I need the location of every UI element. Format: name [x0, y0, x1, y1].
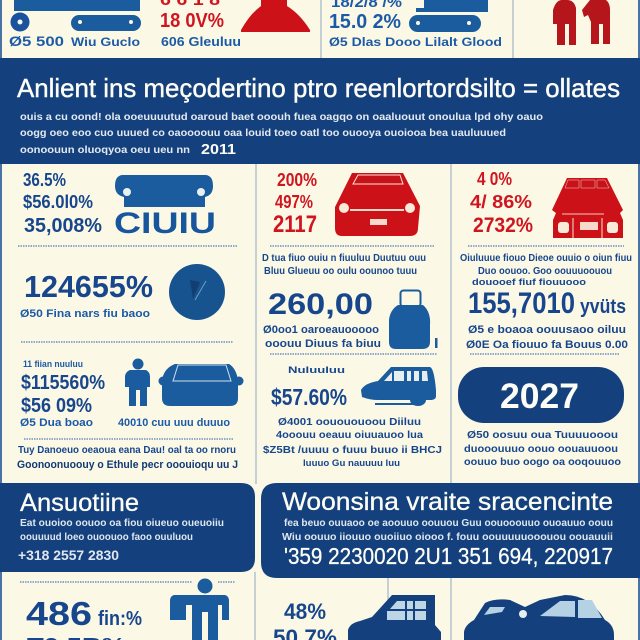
statistics: Nuluuluu — [288, 365, 345, 375]
panel: header band — [0, 58, 640, 164]
caption: Ø0E Oa fiouuo fa Bouus 0.00 — [466, 339, 628, 351]
big number: yvüts — [580, 296, 626, 318]
statistics group: 11 fiian nuuluu — [23, 359, 83, 369]
panel: bottom middle statistic — [273, 595, 441, 640]
big number: 260,00 — [268, 288, 373, 321]
description: Wiu oouuo iiouuo ouoiiuo oiooo f. fouu oouuuuuooouou oouauuii — [282, 532, 613, 543]
blue statistics: 15.0 2% — [329, 11, 401, 33]
red statistics: 4/ 86% — [470, 192, 532, 212]
icon: dark car — [464, 595, 614, 640]
description text: oogg oeo eoo cuo uuued co oaoooouu oaa louid toeo oatl too ouooya ouoiooa bea uauluuued — [20, 128, 506, 139]
red statistics: 4 0% — [477, 169, 512, 189]
panel: bottom left statistic — [26, 578, 229, 640]
red statistics: 18 0V% — [160, 10, 224, 32]
panel: right column — [458, 169, 632, 468]
description — [262, 253, 426, 277]
caption: 40010 cuu uuu duuuo — [118, 417, 230, 429]
red statistics: 200% — [277, 170, 317, 190]
description — [464, 430, 621, 468]
number row: '359 2230020 2U1 351 694, 220917 — [284, 543, 613, 569]
caption: Ø5 e boaoa oouusaoo oiluu — [468, 324, 626, 336]
panel: left column — [17, 170, 244, 471]
label: ciuiu: CIUIU — [114, 207, 216, 240]
icon: person — [170, 578, 229, 640]
description — [18, 518, 224, 563]
description: duooouuuo oouo oouauuoou — [464, 444, 618, 455]
description: Ø50 oosuu oua Tuuuuooou — [467, 430, 618, 441]
description: Ø4001 oouououoou Diiluu — [278, 417, 421, 428]
icon: tractor — [389, 290, 438, 349]
description — [460, 253, 632, 287]
caption: Ø50 Fina nars fiu baoo — [20, 308, 150, 320]
icon: dark vehicle — [348, 595, 441, 640]
statistics group — [23, 170, 102, 237]
icon: circle badge — [169, 264, 225, 320]
statistics — [271, 365, 347, 410]
icon: suv — [361, 367, 436, 406]
caption — [9, 33, 140, 49]
panel: top left fragment — [9, 0, 141, 49]
icon: sofa — [158, 364, 244, 406]
panel: top centre fragment — [160, 0, 310, 49]
red statistics — [273, 170, 317, 238]
year pill: 2027 — [500, 377, 579, 416]
description: luuuo Gu nauuuu luu — [303, 458, 400, 468]
statistics: $57.60% — [271, 384, 347, 410]
percentages: 48% — [284, 599, 326, 624]
icon: red vehicle fragment — [241, 0, 310, 32]
big number — [26, 595, 142, 640]
heading: Woonsina vraite sracencinte — [282, 488, 613, 516]
description: D tua fiuo ouiu n fiuuluu Duutuu ouu — [262, 253, 426, 264]
footnote: Goonoonuoouy o Ethule pecr ooouioqu uu J — [17, 459, 238, 471]
caption — [466, 324, 628, 351]
description: douooef fiuf fiouuooo — [472, 277, 587, 287]
statistics group: Ø5 Dua boao — [20, 417, 93, 429]
description: Duo oouoo. Goo oouuuoouou — [478, 266, 612, 277]
red statistics — [470, 169, 533, 237]
description: Eat ouoioo oouoo oa fiou oiueuo oueuoiiu — [20, 518, 224, 529]
icon: person — [125, 358, 150, 406]
red statistics: 2732% — [473, 214, 533, 237]
red statistics — [160, 0, 224, 32]
panel: top third fragment — [329, 0, 502, 49]
description: oouuo buo oogo oa ooqouuoo — [464, 457, 621, 468]
big number: 155,7010 — [468, 287, 575, 320]
footnote: Tuy Danoeuo oeaoua eana Dau! oal ta oo rnoru — [18, 445, 236, 456]
description: $Z5Bt /uuuu o fuuu buuo ii BHCJ — [263, 445, 442, 456]
big number: 124655% — [24, 269, 153, 304]
icon: red car front — [552, 178, 623, 238]
caption: Ø5 500 — [9, 33, 64, 49]
heading: Ansuotiine — [20, 489, 139, 517]
footnote — [17, 445, 238, 471]
red statistics: 497% — [275, 192, 313, 212]
icon: blue vehicle fragment — [409, 0, 488, 32]
caption: Ø0oo1 oaroeauooooo — [263, 324, 379, 336]
percentages — [273, 599, 337, 640]
description: oouuuud loeo ouoouoo faoo ouuluou — [20, 532, 193, 543]
title: Anlient ins meçodertino ptro reenlortordsilto = ollates — [17, 73, 620, 103]
blue statistics — [329, 0, 402, 33]
statistics group: $56 09% — [21, 395, 92, 417]
statistics group: 35,008% — [24, 215, 102, 237]
panel: middle column — [262, 170, 442, 468]
panel: bottom right — [261, 483, 640, 578]
big number: fin:% — [98, 608, 142, 630]
statistics group: 36.5% — [23, 170, 66, 190]
description — [263, 417, 442, 468]
description — [282, 518, 613, 543]
caption: 606 Gleuluu — [161, 34, 241, 49]
year pill — [458, 367, 624, 423]
big number: 486 — [26, 595, 92, 632]
statistics group — [20, 359, 105, 429]
description: +318 2557 2830 — [18, 547, 119, 563]
caption: Wiu Guclo — [71, 35, 140, 49]
statistics group: $56.0l0% — [23, 192, 93, 212]
description text: 2011 — [201, 141, 236, 158]
panel: bottom left — [0, 483, 255, 572]
icon: blue vehicle fragment — [10, 0, 141, 32]
icon: red people — [553, 0, 610, 45]
caption: ooouu Diuus fa biuu — [265, 338, 381, 350]
description: fea beuo ouuaoo oe aoouuo oouuou Guu oouooouuo ouoauuo oouu — [284, 518, 613, 529]
description: Oiuluuue fiouo Dieoe ouuio o oiun fiuu — [460, 253, 632, 264]
red statistics: 2117 — [273, 211, 317, 238]
description: Bluu Glueuu oo oulu oounoo tuuu — [264, 266, 417, 277]
description text: oonoouun oluoqyoa oeu ueu nn — [20, 145, 190, 156]
description text — [20, 112, 543, 158]
icon: couch — [115, 175, 213, 207]
caption: Ø5 Dlas Dooo Lilalt Glood — [329, 35, 502, 49]
description text: ouis a cu oond! ola ooeuuuutud oaroud baet ooouh fuea oagqo on oaaluouut onoulua lpd ohy oauo — [20, 112, 543, 123]
description: 4ooouu oeauu oiuuauoo lua — [276, 430, 423, 441]
statistics group: $115560% — [21, 372, 105, 394]
icon: red car — [335, 173, 420, 236]
caption — [263, 324, 381, 350]
